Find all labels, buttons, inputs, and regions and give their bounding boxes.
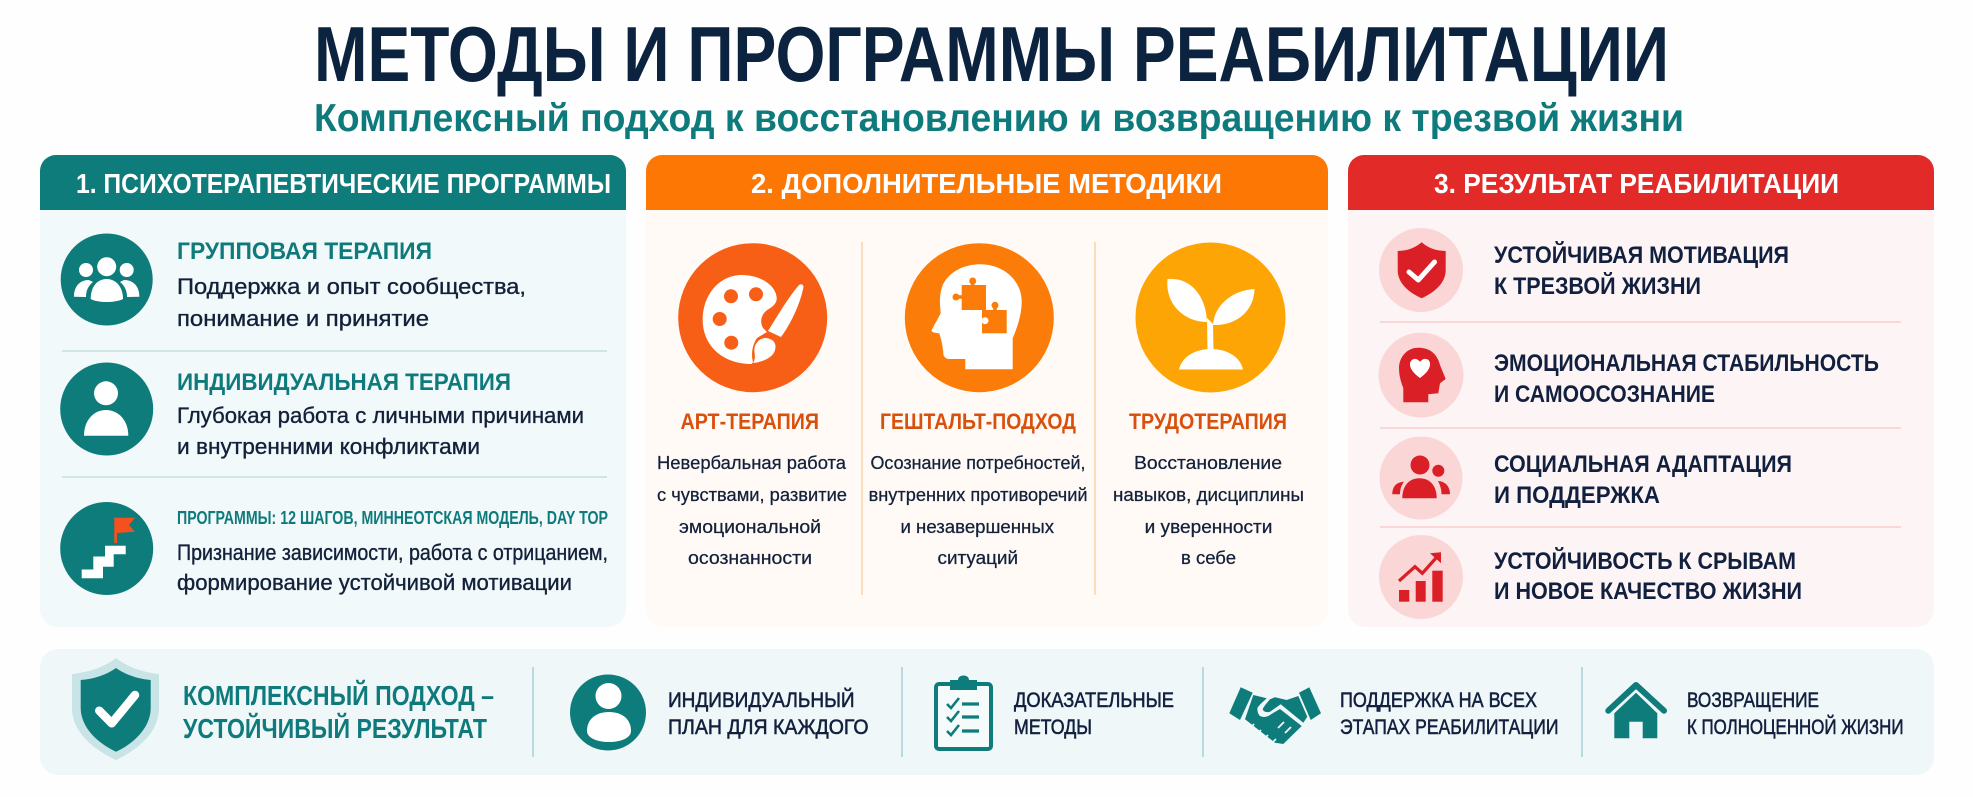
art therapy text: эмоциональной	[679, 516, 821, 537]
support at all stages text: ПОДДЕРЖКА НА ВСЕХ	[1340, 689, 1537, 712]
panel 1 header	[40, 155, 626, 210]
evidence-based methods text	[1014, 689, 1174, 739]
result 3 text	[1494, 451, 1792, 509]
subtitle: Комплексный подход к восстановлению и возвращению к трезвой жизни	[314, 97, 1684, 140]
individual therapy text: и внутренними конфликтами	[177, 434, 480, 459]
icon: handshake	[1229, 687, 1321, 744]
evidence-based methods text: ДОКАЗАТЕЛЬНЫЕ	[1014, 689, 1174, 712]
result 4 text: УСТОЙЧИВОСТЬ К СРЫВАМ	[1494, 547, 1796, 575]
icon: person	[60, 362, 153, 456]
group therapy text: понимание и принятие	[177, 306, 429, 331]
panel 2 header	[646, 155, 1328, 210]
group therapy text	[177, 238, 526, 331]
result 2 text: ЭМОЦИОНАЛЬНАЯ СТАБИЛЬНОСТЬ	[1494, 350, 1879, 377]
icon: group of people	[61, 234, 153, 326]
panel 1 header: 1. ПСИХОТЕРАПЕВТИЧЕСКИЕ ПРОГРАММЫ	[76, 168, 611, 199]
comprehensive approach text	[183, 679, 494, 744]
occupational therapy text: навыков, дисциплины	[1113, 484, 1304, 505]
return to full life text	[1687, 689, 1904, 739]
icon: growth chart	[1379, 535, 1463, 619]
occupational therapy text	[1113, 409, 1304, 568]
result 3 text: И ПОДДЕРЖКА	[1494, 482, 1660, 509]
icon: stairs with flag	[60, 502, 153, 595]
icon: clipboard checklist	[936, 676, 991, 749]
icon: head with puzzle	[905, 243, 1054, 392]
gestalt text: Осознание потребностей,	[870, 452, 1086, 473]
return to full life text: К ПОЛНОЦЕННОЙ ЖИЗНИ	[1687, 715, 1904, 739]
art therapy text	[657, 409, 847, 568]
icon: house	[1608, 685, 1664, 738]
programs text: ПРОГРАММЫ: 12 ШАГОВ, МИННЕОТСКАЯ МОДЕЛЬ, DAY TOP	[177, 508, 608, 528]
group therapy text: ГРУППОВАЯ ТЕРАПИЯ	[177, 238, 432, 265]
occupational therapy text: Восстановление	[1134, 452, 1282, 473]
result 4 text	[1494, 547, 1802, 605]
icon: head with heart	[1378, 332, 1464, 418]
gestalt text	[869, 409, 1088, 568]
comprehensive approach text: УСТОЙЧИВЫЙ РЕЗУЛЬТАТ	[183, 712, 487, 744]
icon: palette and brush	[678, 243, 827, 392]
occupational therapy text: в себе	[1181, 547, 1236, 568]
individual therapy text: ИНДИВИДУАЛЬНАЯ ТЕРАПИЯ	[177, 369, 511, 396]
group therapy text: Поддержка и опыт сообщества,	[177, 274, 526, 299]
icon: red people	[1380, 436, 1462, 520]
support at all stages text: ЭТАПАХ РЕАБИЛИТАЦИИ	[1340, 716, 1558, 739]
result 1 text: УСТОЙЧИВАЯ МОТИВАЦИЯ	[1494, 241, 1789, 269]
icon: red shield	[1379, 228, 1463, 312]
programs text	[177, 508, 608, 595]
art therapy text: Невербальная работа	[657, 452, 847, 473]
programs text: формирование устойчивой мотивации	[177, 570, 572, 595]
occupational therapy text: и уверенности	[1145, 516, 1272, 537]
result 3 text: СОЦИАЛЬНАЯ АДАПТАЦИЯ	[1494, 451, 1792, 478]
result 2 text	[1494, 350, 1879, 408]
panel: psychotherapy programs	[40, 155, 626, 627]
gestalt text: ситуаций	[938, 547, 1018, 568]
individual therapy text: Глубокая работа с личными причинами	[177, 403, 584, 428]
icon: sprout	[1136, 242, 1286, 392]
art therapy text: с чувствами, развитие	[657, 484, 847, 505]
result 1 text: К ТРЕЗВОЙ ЖИЗНИ	[1494, 272, 1701, 300]
panel 2 header: 2. ДОПОЛНИТЕЛЬНЫЕ МЕТОДИКИ	[751, 168, 1222, 199]
evidence-based methods text: МЕТОДЫ	[1014, 716, 1092, 739]
gestalt text: ГЕШТАЛЬТ-ПОДХОД	[880, 409, 1076, 434]
icon: individual plan person	[570, 674, 646, 750]
art therapy text: АРТ-ТЕРАПИЯ	[680, 409, 819, 434]
comprehensive approach text: КОМПЛЕКСНЫЙ ПОДХОД –	[183, 679, 494, 711]
result 4 text: И НОВОЕ КАЧЕСТВО ЖИЗНИ	[1494, 578, 1802, 605]
programs text: Признание зависимости, работа с отрицанием,	[177, 540, 608, 565]
title: МЕТОДЫ И ПРОГРАММЫ РЕАБИЛИТАЦИИ	[314, 10, 1669, 98]
panel 3 header: 3. РЕЗУЛЬТАТ РЕАБИЛИТАЦИИ	[1434, 168, 1839, 199]
art therapy text: осознанности	[688, 547, 812, 568]
return to full life text: ВОЗВРАЩЕНИЕ	[1687, 689, 1819, 712]
occupational therapy text: ТРУДОТЕРАПИЯ	[1129, 409, 1287, 434]
panel 3 header	[1348, 155, 1934, 210]
support at all stages text	[1340, 689, 1558, 739]
bottom summary band	[40, 649, 1934, 775]
individual plan text: ИНДИВИДУАЛЬНЫЙ	[668, 688, 855, 712]
individual plan text	[668, 688, 869, 739]
result 2 text: И САМООСОЗНАНИЕ	[1494, 381, 1715, 408]
gestalt text: внутренних противоречий	[869, 484, 1088, 505]
panel: additional methods	[646, 155, 1328, 627]
gestalt text: и незавершенных	[900, 516, 1055, 537]
result 1 text	[1494, 241, 1789, 300]
individual therapy text	[177, 369, 584, 459]
panel: rehabilitation results	[1348, 155, 1934, 627]
individual plan text: ПЛАН ДЛЯ КАЖДОГО	[668, 716, 869, 739]
icon: teal shield with check	[72, 658, 159, 760]
